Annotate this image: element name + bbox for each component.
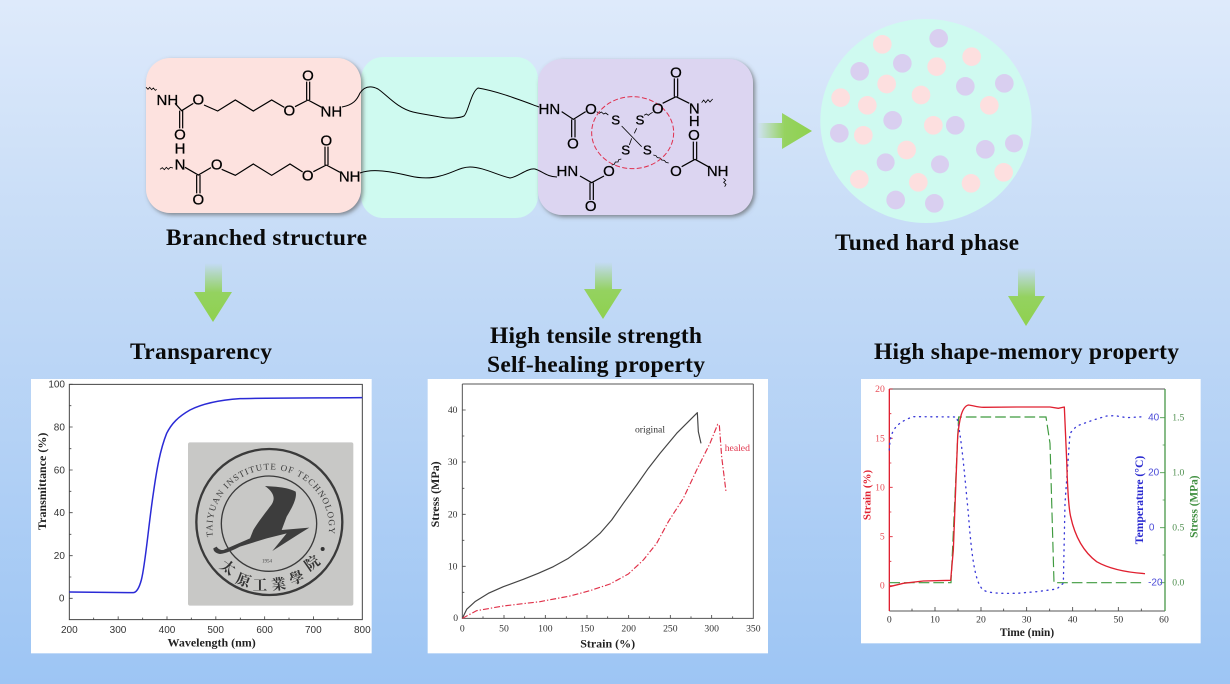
upper chain (157, 68, 342, 144)
inset: logo photo (188, 442, 354, 606)
y axis labels: 100 (48, 380, 65, 391)
x axis labels: 200 (61, 625, 78, 636)
strain axis labels: Strain (%) (861, 469, 873, 520)
chemical structure: disulfide urethane chains: NH (707, 163, 728, 180)
inset: logo photo: 太 (217, 557, 239, 579)
heading: tuned hard phase: Tuned hard phase (835, 230, 1019, 256)
inset: logo photo: 原 (233, 569, 255, 592)
heading: tensile strength and self-healing: Self-healing property (487, 352, 705, 378)
upper chain: O (193, 91, 204, 108)
x axis labels: 300 (704, 624, 719, 635)
x axis labels: Wavelength (nm) (168, 635, 256, 649)
y axis labels: 30 (448, 457, 458, 468)
panel: disulfide hard segment (purple) (538, 59, 753, 215)
x axis labels: 0 (887, 614, 892, 625)
red dashed circle (592, 97, 674, 169)
y axis labels: 60 (54, 465, 65, 476)
heading: tensile strength and self-healing: High tensile strength (490, 323, 702, 349)
temperature axis labels: 20 (1148, 468, 1160, 479)
chemical structure: disulfide urethane chains: N (689, 100, 700, 117)
x axis labels: 300 (110, 625, 127, 636)
x axis labels: 250 (663, 624, 678, 635)
y axis labels: 40 (448, 405, 458, 416)
chemical structure: disulfide urethane chains: HN (539, 101, 560, 118)
strain axis labels (861, 384, 885, 592)
inset: logo photo: 院 (301, 551, 324, 575)
chart: stress vs strain (428, 379, 768, 653)
heading: transparency: Transparency (130, 339, 272, 365)
lower chain: O (321, 133, 332, 150)
heading: shape memory: High shape-memory property (874, 339, 1179, 365)
chemical structure: disulfide urethane chains: O (585, 101, 597, 118)
upper chain: O (302, 68, 314, 85)
stress axis labels: 1.0 (1172, 468, 1185, 479)
disulfide centre (597, 112, 669, 165)
upper chain: O (174, 127, 186, 144)
x axis labels: 200 (621, 624, 636, 635)
y axis labels: 20 (448, 509, 458, 520)
lower chain (160, 133, 360, 208)
temperature axis labels: 40 (1148, 413, 1160, 424)
chemical structure: disulfide urethane chains: O (670, 163, 682, 180)
y axis labels: 10 (448, 561, 458, 572)
pink domains (831, 35, 1013, 193)
healed curve (462, 424, 726, 618)
x axis labels: 150 (580, 624, 594, 635)
strain axis labels: 15 (875, 433, 885, 444)
purple domains (830, 29, 1023, 213)
x axis labels: 100 (538, 624, 553, 635)
strain axis labels: 5 (880, 532, 885, 543)
x axis labels: 50 (1114, 614, 1123, 625)
lower chain: N (175, 156, 185, 173)
arrow: to shape memory (1008, 268, 1045, 326)
soft-segment chain lines (342, 87, 557, 178)
lower chain: O (193, 191, 204, 208)
panel: branched hard segment (pink) (146, 58, 361, 213)
heading: branched structure: Branched structure (166, 225, 367, 251)
y axis labels (428, 405, 458, 624)
heading: tensile strength and self-healing (487, 323, 705, 378)
chemical structure: disulfide urethane chains: H (689, 113, 700, 130)
chemical structure: disulfide urethane chains: O (670, 64, 682, 81)
strain axis labels: 10 (875, 482, 885, 493)
chart: transmittance vs wavelength (31, 379, 372, 654)
disulfide centre: S (621, 142, 630, 157)
x axis labels: 800 (354, 625, 371, 636)
curve labels: healed (725, 443, 750, 454)
x axis labels: 600 (256, 625, 273, 636)
chart: shape-memory cycle (861, 379, 1201, 643)
y axis labels: 0 (59, 594, 65, 605)
lower chain: NH (339, 168, 360, 185)
lower chain: O (211, 156, 222, 173)
chemical structure: branched urethane chains (146, 68, 360, 208)
x axis labels (887, 614, 1169, 639)
y axis labels: 0 (453, 613, 458, 624)
chemical structure: disulfide urethane chains: O (567, 136, 579, 153)
upper chain: NH (157, 92, 178, 109)
tuned hard phase circle (820, 19, 1032, 223)
lower chain: O (302, 168, 313, 185)
stress axis labels: 1.5 (1172, 413, 1185, 424)
inset: logo photo: 1954 (262, 560, 272, 565)
curve labels (635, 425, 750, 454)
temperature axis labels: 0 (1149, 523, 1155, 534)
chemical structure: disulfide urethane chains (539, 64, 728, 215)
disulfide centre: S (611, 113, 620, 128)
x axis labels (61, 625, 371, 649)
arrow: to transparency (194, 263, 232, 322)
strain axis labels: 0 (880, 581, 885, 592)
original curve (462, 413, 701, 618)
x axis labels: 60 (1159, 614, 1169, 625)
chemical structure: disulfide urethane chains: O (652, 100, 663, 117)
temperature axis labels (1133, 413, 1163, 589)
x axis labels: 400 (159, 625, 176, 636)
x axis labels: Time (min) (1000, 627, 1054, 639)
strain curve (889, 405, 1145, 587)
y axis labels: 80 (54, 422, 65, 433)
stress dashed curve (889, 417, 1143, 583)
temperature dotted curve (889, 416, 1145, 593)
y axis labels (35, 380, 65, 605)
x axis labels: Strain (%) (580, 637, 635, 651)
blue curve (69, 398, 362, 593)
inset: logo photo: 學 (286, 568, 307, 589)
temperature axis labels: Temperature (°C) (1133, 456, 1146, 544)
x axis labels: 500 (207, 625, 224, 636)
chemical structure: disulfide urethane chains: O (603, 163, 615, 180)
curve labels: original (635, 425, 665, 436)
x axis labels (460, 624, 761, 651)
stress axis labels: 0.0 (1172, 578, 1185, 589)
inset: logo photo: 業 (270, 574, 287, 594)
disulfide centre: S (636, 113, 645, 128)
arrow: to tuned hard phase (757, 113, 812, 149)
y axis labels: 20 (54, 551, 65, 562)
disulfide centre: S (643, 142, 652, 157)
x axis labels: 20 (976, 614, 986, 625)
lower chain: H (175, 140, 185, 157)
chemical structure: disulfide urethane chains: O (688, 127, 700, 144)
inset: logo photo: 工 (253, 578, 268, 594)
x axis labels: 40 (1068, 614, 1078, 625)
y axis labels: Stress (MPa) (428, 461, 442, 527)
x axis labels: 10 (930, 614, 940, 625)
temperature axis labels: -20 (1148, 578, 1163, 589)
y axis labels: 40 (54, 508, 65, 519)
y axis labels: Transmittance (%) (35, 433, 49, 530)
arrow: to tensile strength (584, 262, 622, 319)
x axis labels: 30 (1022, 614, 1032, 625)
stress axis labels: 0.5 (1172, 523, 1185, 534)
upper chain: O (284, 103, 295, 120)
x axis labels: 350 (746, 624, 761, 635)
chemical structure: disulfide urethane chains: HN (557, 163, 578, 180)
stress axis labels (1172, 413, 1200, 589)
panel: soft segment (teal) (361, 57, 538, 218)
strain axis labels: 20 (875, 384, 885, 395)
inset: logo photo: TAIYUAN INSTITUTE OF TECHNOLOGY (206, 464, 335, 538)
x axis labels: 50 (499, 624, 509, 635)
x axis labels: 700 (305, 625, 322, 636)
x axis labels: 0 (460, 624, 465, 635)
chemical structure: disulfide urethane chains: O (585, 198, 596, 215)
stress axis labels: Stress (MPa) (1188, 475, 1200, 538)
upper chain: NH (321, 103, 342, 120)
